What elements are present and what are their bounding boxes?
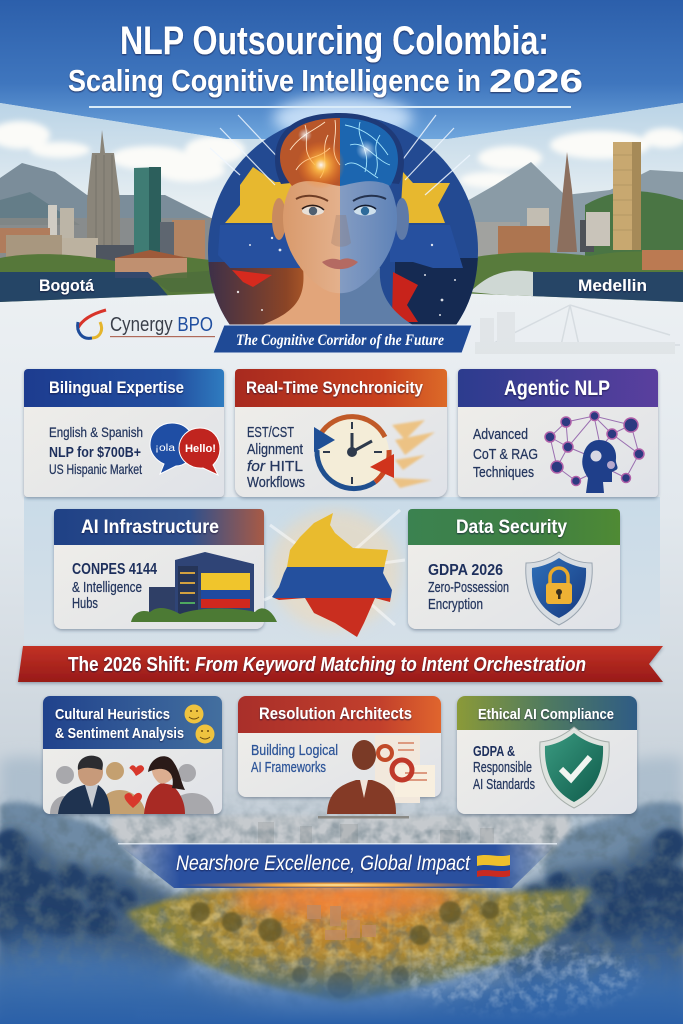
title: Scaling Cognitive Intelligence in [68, 63, 481, 98]
title [68, 19, 583, 99]
body text: Workflows [247, 474, 305, 491]
body text: for HITL [247, 458, 303, 475]
icon: green shield with check [540, 727, 609, 808]
body text [247, 424, 305, 491]
label: Medellín: Medellin [578, 276, 647, 295]
icon: speech bubbles: Hello! [185, 443, 216, 455]
illustration: people and hearts [50, 756, 214, 814]
logo: Cynergy BPO [78, 310, 215, 338]
body text [72, 561, 157, 612]
body text: CONPES 4144 [72, 561, 157, 578]
body text: AI Frameworks [251, 759, 326, 776]
title: NLP Outsourcing Colombia: [120, 19, 549, 63]
icon: shield with padlock [526, 552, 592, 625]
heading: AI Infrastructure [81, 517, 219, 538]
panel: Cultural Heuristics [43, 696, 222, 814]
body text: GDPA 2026 [428, 562, 503, 579]
body text [49, 424, 143, 477]
body text: Alignment [247, 441, 304, 458]
background: misty mountains, forest and sunset valley [0, 757, 683, 1024]
body text: EST/CST [247, 424, 294, 441]
icon: data centre building with flag [131, 552, 277, 622]
heading [55, 706, 184, 742]
icon: clock with arrows [314, 416, 435, 490]
body text: CoT & RAG [473, 446, 538, 463]
heading: Resolution Architects [259, 704, 412, 723]
brain [280, 118, 398, 189]
label: Bogotá: Bogotá [39, 276, 95, 295]
icon: speech bubbles: ¡ola [155, 443, 176, 454]
faint bridge decoration [475, 305, 680, 354]
panel: Agentic NLP [458, 369, 658, 497]
body text: US Hispanic Market [49, 461, 142, 477]
panel: Resolution Architects [238, 696, 441, 818]
ribbon: The 2026 Shift [18, 646, 663, 682]
globe background [208, 118, 478, 324]
title: 2026 [489, 63, 583, 99]
heading: Data Security [456, 517, 567, 538]
panel: Data Security [408, 509, 620, 629]
panel: Ethical AI Compliance [457, 696, 637, 814]
ribbon: The 2026 Shift: The 2026 Shift: From Keyword Matching to Intent Orchestration [68, 654, 586, 676]
heading: Ethical AI Compliance [478, 706, 614, 723]
heading: Bilingual Expertise [49, 378, 184, 397]
logo wordmark: Cynergy BPO [110, 314, 213, 336]
footer banner [118, 843, 557, 888]
icon: Colombian flag [477, 855, 510, 877]
panel: Bilingual Expertise [24, 369, 224, 497]
hero: circular portrait with Colombia map and brain [208, 113, 478, 324]
city photo: Medellín [420, 103, 683, 302]
body text: English & Spanish [49, 424, 143, 440]
ears [272, 198, 409, 240]
city photo: Bogotá [0, 103, 266, 302]
body text: GDPA & [473, 743, 515, 760]
body text [251, 742, 338, 776]
panel: Real-Time Synchronicity [235, 369, 447, 497]
icon: speech bubbles [150, 423, 220, 475]
body text: Advanced [473, 426, 528, 443]
panel: Colombia map with rays [264, 510, 405, 640]
body text: & Intelligence [72, 579, 142, 596]
body text [428, 562, 509, 613]
skull dome [275, 113, 404, 184]
header: blue title band [0, 0, 683, 139]
body text: NLP for $700B+ [49, 444, 141, 461]
body text: Hubs [72, 595, 98, 612]
neck and shoulders [262, 268, 413, 325]
header glow behind head [273, 96, 413, 140]
tagline: Nearshore Excellence, Global Impact [176, 852, 471, 875]
body text: Zero-Possession [428, 579, 509, 596]
title underline [89, 106, 571, 108]
body text: Responsible [473, 759, 532, 776]
panel: AI Infrastructure [54, 509, 277, 629]
body text: Building Logical [251, 742, 338, 759]
icon: documents and gears [375, 735, 435, 803]
icon: smileys [184, 704, 214, 744]
light inner panel behind cards [24, 497, 660, 657]
logo mark [78, 310, 106, 338]
heading: Cultural Heuristics [55, 706, 170, 723]
heading: Real-Time Synchronicity [246, 378, 423, 397]
icon: architect silhouette [318, 740, 409, 818]
body text [473, 426, 538, 481]
face [283, 181, 397, 294]
body text: Techniques [473, 464, 534, 481]
light rays [210, 115, 470, 195]
body text: Encryption [428, 596, 483, 613]
heading: Agentic NLP [504, 377, 610, 400]
tagline banner: The Cognitive Corridor of the Future [236, 332, 444, 349]
tagline banner [213, 325, 472, 353]
icon: neural network with head [545, 412, 644, 493]
heading: & Sentiment Analysis [55, 725, 184, 742]
body text: AI Standards [473, 776, 535, 793]
body text [473, 743, 535, 793]
